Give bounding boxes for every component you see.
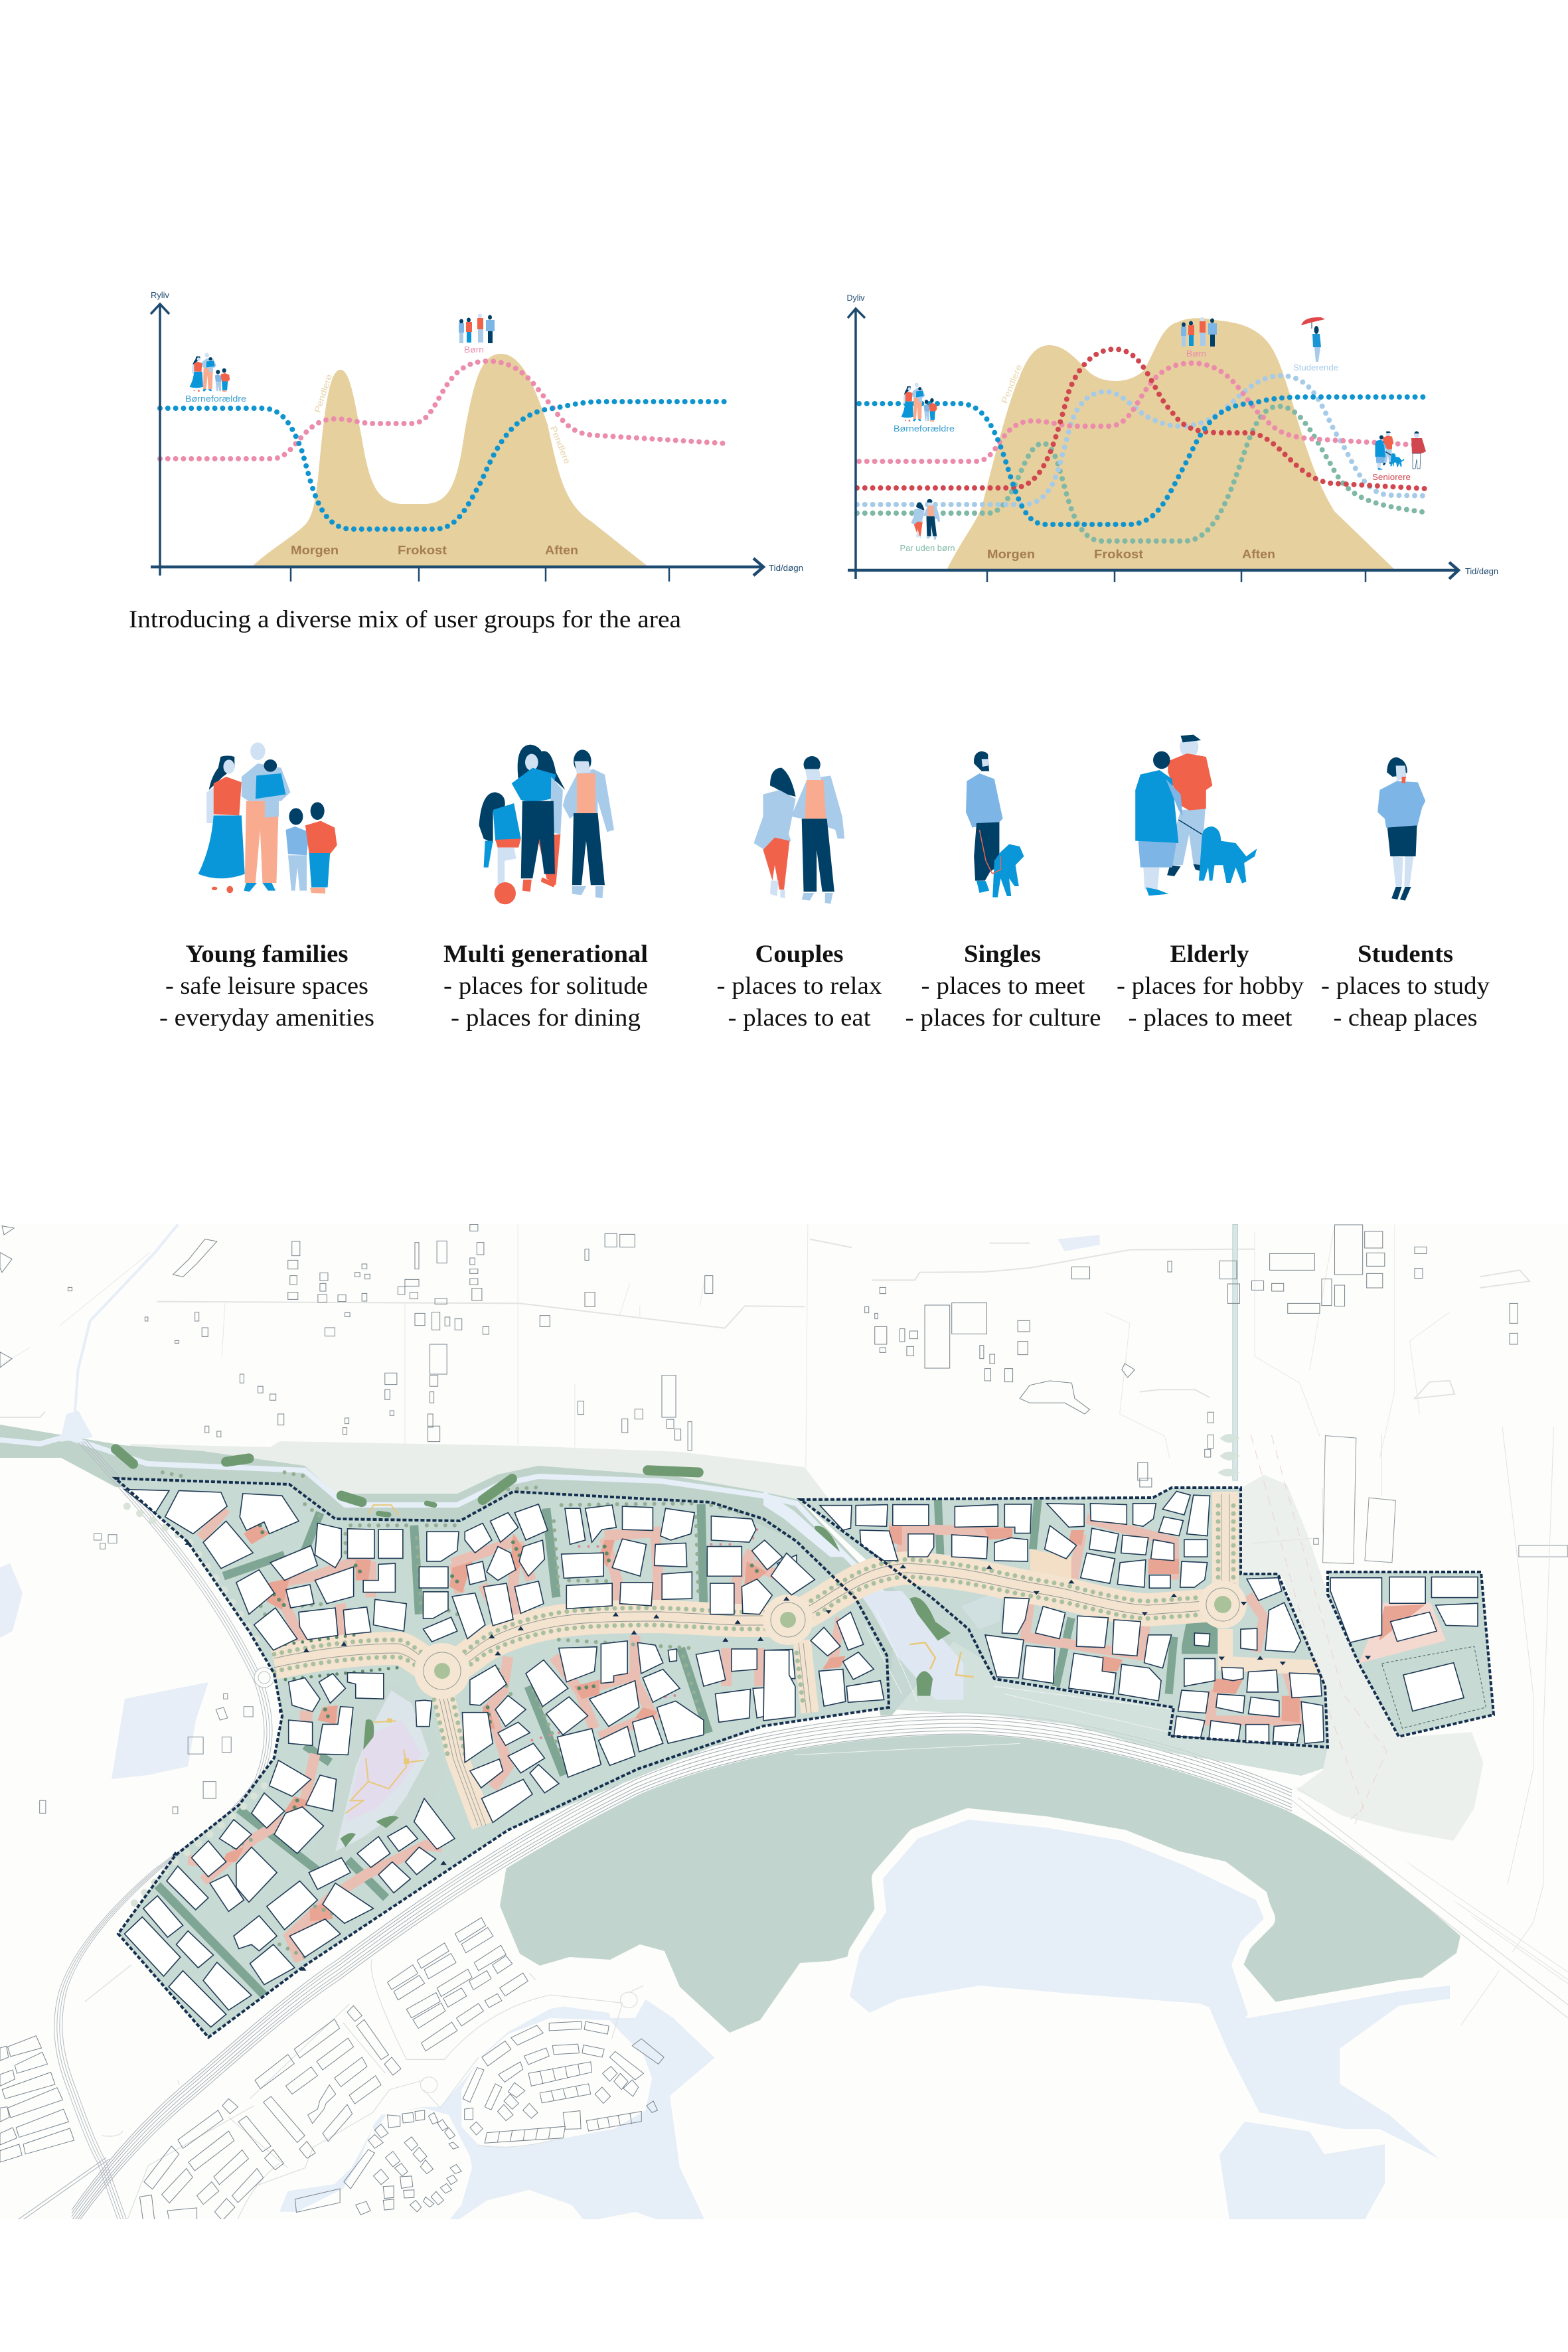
roundabouts xyxy=(414,1581,1247,1699)
boulevards and roundabouts xyxy=(274,1492,1318,1826)
chart: daily life today xyxy=(151,290,803,582)
commuter activity hill xyxy=(252,354,649,567)
dashed site boundaries xyxy=(116,1478,1494,2037)
buildings, western site xyxy=(124,1490,797,2027)
heading and needs: - places to meet xyxy=(1129,1004,1293,1032)
icon: elderly couple with dog xyxy=(1135,735,1257,896)
caption: Introducing a diverse mix of user groups for the area xyxy=(129,606,681,633)
meadow xyxy=(130,1441,830,1507)
user group: young families xyxy=(159,742,374,1032)
roundabout islands xyxy=(434,1596,1231,1679)
west pond xyxy=(112,1682,208,1779)
white shore band xyxy=(850,1820,1450,2020)
activity hill xyxy=(947,318,1395,570)
heading and needs xyxy=(1117,941,1304,1032)
chart labels xyxy=(847,293,1498,576)
chart labels: Frokost xyxy=(398,544,447,557)
chart labels: Pendlere xyxy=(999,363,1024,405)
chart labels: Tid/døgn xyxy=(1465,566,1498,576)
axes xyxy=(151,304,763,582)
masterplan map xyxy=(0,1224,1568,2231)
side streets xyxy=(442,1492,1318,1826)
lake, green shore and water xyxy=(0,1563,1464,2219)
chart labels: Pendlere xyxy=(548,425,572,465)
surrounding context: north fields xyxy=(0,1224,1529,1487)
chart: proposed daily life xyxy=(847,293,1498,582)
river park between sites xyxy=(763,1490,1174,1755)
user group: couples xyxy=(717,756,882,1032)
dotted line: couples xyxy=(857,406,1427,541)
icon: senior man xyxy=(1411,431,1426,469)
chart labels: Studerende xyxy=(1293,362,1338,372)
user group: students xyxy=(1321,757,1490,1032)
heading and needs: - places for hobby xyxy=(1117,973,1304,1000)
chart labels: Pendlere xyxy=(312,373,334,414)
axes xyxy=(848,309,1458,582)
chart labels: Seniorere xyxy=(1372,472,1411,482)
chart labels: Børn xyxy=(1186,349,1206,358)
courtyards and lanes, eastern sites xyxy=(823,1500,1446,1723)
heading and needs: Young families xyxy=(186,941,348,968)
small water edge xyxy=(0,1563,23,1638)
canal xyxy=(0,1437,883,1593)
dotted line: students xyxy=(857,376,1429,505)
heading and needs: - places to meet xyxy=(921,973,1085,1000)
chart labels: Morgen xyxy=(987,548,1035,561)
central site boundary xyxy=(801,1488,1328,1747)
dotted line: parents xyxy=(160,402,726,529)
heading and needs: - places to eat xyxy=(728,1004,871,1032)
central lake park xyxy=(310,1505,447,1864)
heading and needs xyxy=(443,941,648,1032)
icon: small seniors xyxy=(1375,431,1404,470)
icon: small family xyxy=(190,353,230,392)
north green belt xyxy=(0,1411,982,1726)
surrounding context: east green area and large buildings xyxy=(1241,1427,1568,2025)
icon: student xyxy=(1377,757,1425,901)
heading and needs: - places for culture xyxy=(905,1004,1101,1032)
site trees xyxy=(116,1449,793,1957)
chart labels: Ryliv xyxy=(151,290,169,300)
entrance markers xyxy=(172,1541,1371,1971)
carriageway lines xyxy=(274,1563,1223,1674)
icon: student with umbrella xyxy=(1301,317,1325,362)
south pond xyxy=(1219,2122,1385,2219)
heading and needs: - safe leisure spaces xyxy=(165,973,368,1000)
heading and needs: Couples xyxy=(755,941,843,968)
western site boundary xyxy=(116,1478,889,2037)
user group: elderly xyxy=(1117,735,1304,1032)
green band xyxy=(0,1425,982,1726)
heading and needs: - cheap places xyxy=(1333,1004,1478,1032)
main lake xyxy=(850,1820,1264,2020)
icon: small children xyxy=(1181,317,1217,347)
icon: family xyxy=(198,742,337,894)
dotted line: children xyxy=(859,363,1425,461)
dotted line: seniors xyxy=(857,349,1425,489)
chart labels xyxy=(151,290,803,573)
chart labels: Morgen xyxy=(291,544,339,557)
heading and needs: Students xyxy=(1358,941,1453,968)
heading and needs: - places to study xyxy=(1321,973,1490,1000)
icon: couple xyxy=(753,756,844,904)
courtyards and lanes, western site xyxy=(157,1504,797,1996)
water channel xyxy=(1208,1986,1450,2159)
heading and needs: Elderly xyxy=(1170,941,1249,968)
icon: small children xyxy=(459,313,495,343)
chart labels: Aften xyxy=(1242,548,1275,561)
heading and needs xyxy=(717,941,882,1032)
boulevard tree rows xyxy=(274,1500,1233,1759)
icon: man with dog xyxy=(966,751,1024,898)
user group: multi generational xyxy=(443,745,648,1032)
boulevard edge trees xyxy=(285,1605,777,1680)
user group: singles xyxy=(905,751,1101,1032)
south west water and housing xyxy=(0,1918,715,2221)
small west houses xyxy=(40,1533,253,1814)
chart labels: Tid/døgn xyxy=(769,563,803,573)
heading and needs: - everyday amenities xyxy=(159,1004,374,1032)
railway and road corridors xyxy=(17,1441,1568,2231)
heading and needs: - places to relax xyxy=(717,973,882,1000)
eastern site boundary xyxy=(1328,1572,1494,1737)
heading and needs: Multi generational xyxy=(443,941,648,968)
side street lines xyxy=(438,1494,1229,1826)
heading and needs xyxy=(159,941,374,1032)
icon: small family xyxy=(902,383,937,422)
heading and needs xyxy=(1321,941,1490,1032)
dotted line: children xyxy=(160,361,726,459)
chart labels: Dyliv xyxy=(847,293,865,303)
chart labels: Par uden børn xyxy=(900,543,955,553)
roundabout rings xyxy=(424,1588,1239,1689)
heading and needs xyxy=(905,941,1101,1032)
heading and needs: - places for solitude xyxy=(443,973,648,1000)
icon: multi generational family xyxy=(479,745,614,904)
buildings, eastern sites xyxy=(763,1491,1486,1743)
chart labels: Frokost xyxy=(1094,548,1143,561)
heading and needs: - places for dining xyxy=(451,1004,641,1032)
main boulevard xyxy=(274,1568,1223,1670)
icon: small couple xyxy=(911,499,940,540)
heading and needs: Singles xyxy=(964,941,1041,968)
chart labels: Børneforældre xyxy=(894,424,955,433)
chart labels: Børneforældre xyxy=(185,394,246,404)
chart labels: Børn xyxy=(464,345,484,354)
dotted line: parents xyxy=(859,397,1425,524)
site bases xyxy=(116,1478,1494,2037)
chart labels: Aften xyxy=(545,544,578,557)
